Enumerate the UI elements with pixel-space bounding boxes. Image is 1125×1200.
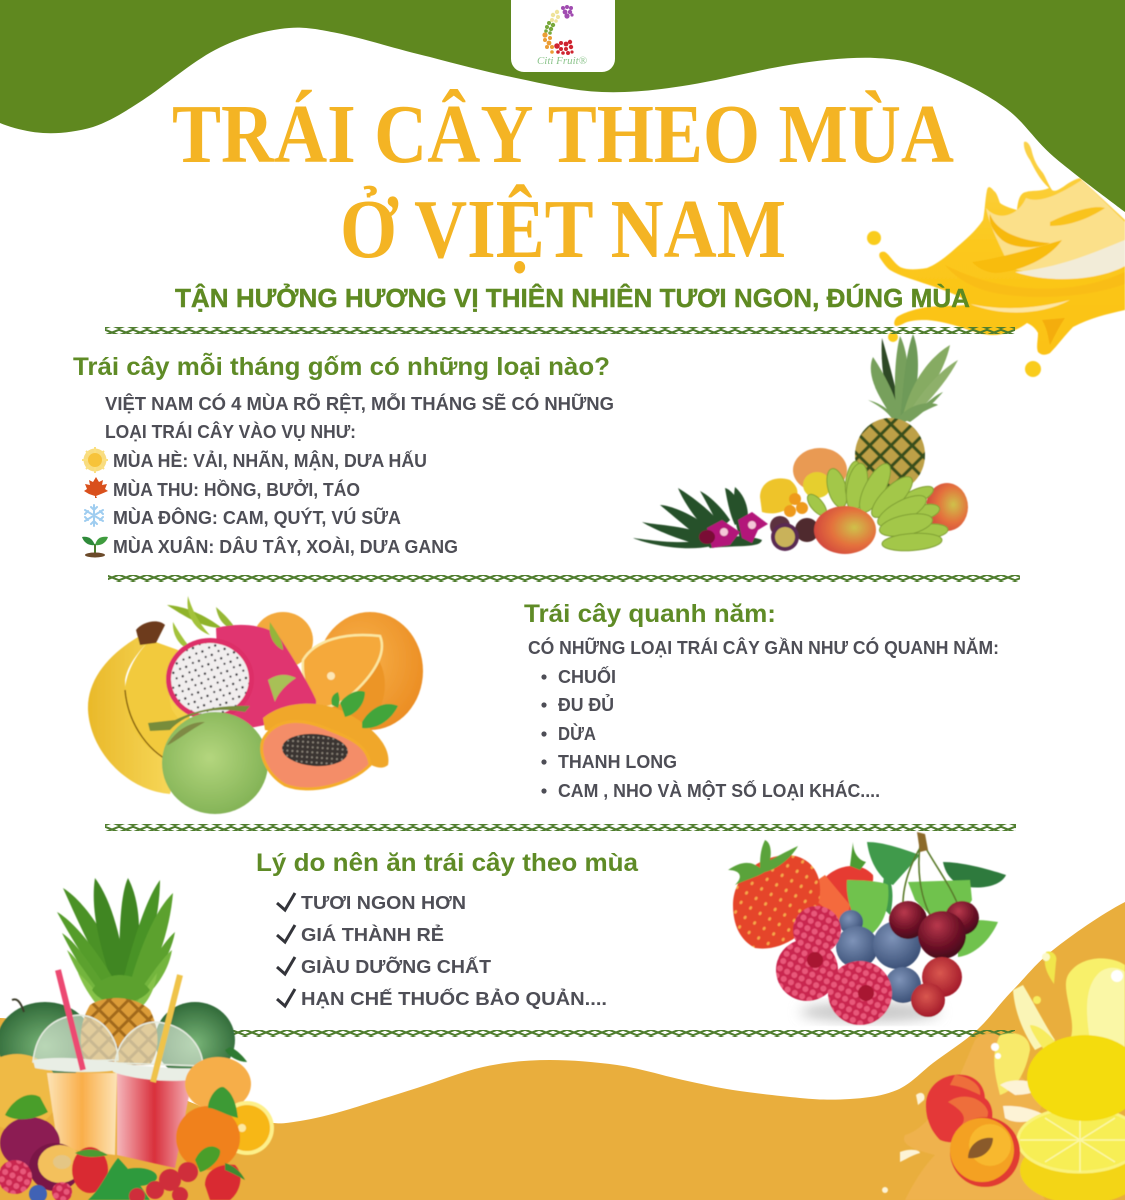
bullet list: CHUỐI (558, 666, 616, 687)
green top wave (0, 0, 1125, 212)
small raspberry (52, 1182, 72, 1200)
orange leaves (331, 691, 398, 728)
bullet list: DỪA (558, 723, 596, 744)
checklist (277, 893, 607, 1009)
pineapple crown (868, 334, 958, 423)
cranberries (911, 957, 962, 1017)
blueberry (29, 1185, 47, 1200)
shadow (800, 1002, 940, 1022)
divider 2 (108, 575, 1020, 582)
illustration: lemon and peach splash (882, 952, 1125, 1200)
right cup (110, 1022, 203, 1168)
oranges (253, 612, 423, 732)
pineapple body (81, 998, 158, 1065)
cherry (926, 1075, 992, 1142)
peach half (950, 1117, 1020, 1187)
icon: sun (82, 447, 108, 473)
plum (0, 1117, 60, 1169)
icon: maple leaf (84, 477, 108, 498)
checklist: TƯƠI NGON HƠN (301, 893, 466, 913)
blueberries (836, 910, 921, 1003)
divider 4 (225, 1030, 1015, 1037)
mint leaves (867, 842, 1006, 915)
cherry stems (903, 845, 958, 915)
divider 1 (105, 327, 1015, 334)
season: summer: MÙA HÈ: VẢI, NHÃN, MẬN, DƯA HẤU (113, 450, 427, 471)
strawberry left (72, 1147, 108, 1193)
icon: snowflake (85, 505, 103, 526)
papaya (262, 704, 388, 789)
juice splash (867, 142, 1125, 377)
checklist: GIÁ THÀNH RẺ (301, 924, 444, 945)
bananas (88, 621, 196, 794)
title (172, 88, 954, 276)
strawberry (728, 840, 820, 949)
strawberry half (810, 866, 873, 922)
mint on plum (5, 1095, 48, 1119)
illustration: year-round fruit (88, 596, 423, 814)
title: TRÁI CÂY THEO MÙA (172, 88, 954, 181)
peach (185, 1047, 251, 1111)
green bananas (804, 459, 949, 553)
checklist: GIÀU DƯỠNG CHẤT (301, 956, 491, 977)
bullet list (541, 666, 880, 801)
pineapple crown (57, 878, 175, 1008)
illustration: smoothies and fruit (0, 878, 274, 1200)
cherries (889, 901, 979, 959)
season: winter: MÙA ĐÔNG: CAM, QUÝT, VÚ SỮA (113, 507, 401, 528)
back mango (793, 448, 847, 492)
panel: year-round text (524, 600, 999, 801)
strawberry right (205, 1163, 245, 1200)
illustration: berries (728, 832, 1006, 1025)
small mint (195, 1146, 220, 1172)
season: spring: MÙA XUÂN: DÂU TÂY, XOÀI, DƯA GANG (113, 536, 458, 557)
currants (129, 1162, 198, 1200)
physalis (784, 493, 808, 517)
logo mark: dotted C (542, 5, 574, 55)
orange (176, 1106, 240, 1170)
bullet list: ĐU ĐỦ (558, 694, 614, 715)
stem knot (917, 832, 928, 852)
orange slice (220, 1101, 274, 1155)
green leaves (847, 880, 998, 957)
panel: monthly fruit text (73, 351, 614, 558)
front mango (814, 506, 876, 554)
melon (0, 1054, 59, 1130)
basil (88, 1158, 157, 1200)
lemon half and slice (1018, 1035, 1125, 1200)
checklist: HẠN CHẾ THUỐC BẢO QUẢN.... (301, 988, 607, 1009)
passion fruits (770, 516, 790, 536)
logo wordmark: Citi Fruit® (537, 56, 587, 67)
pineapple body (855, 418, 925, 492)
dragon fruit (166, 596, 316, 728)
right mango (926, 483, 968, 531)
panel: reasons text (256, 849, 639, 1009)
heading: year-round: Trái cây quanh năm: (524, 600, 776, 628)
logo badge (511, 0, 615, 72)
intro text: LOẠI TRÁI CÂY VÀO VỤ NHƯ: (105, 421, 356, 442)
orchids (699, 512, 768, 548)
icon: sprout (82, 537, 108, 558)
heading: monthly fruit: Trái cây mỗi tháng gốm có những loại nào? (73, 351, 610, 381)
bullet list: THANH LONG (558, 752, 677, 772)
divider 3 (105, 824, 1016, 831)
green coconut (148, 706, 268, 814)
plum half (29, 1143, 82, 1191)
bullet list: CAM , NHO VÀ MỘT SỐ LOẠI KHÁC.... (558, 780, 880, 801)
heading: reasons: Lý do nên ăn trái cây theo mùa (256, 849, 639, 877)
pale splash (1013, 952, 1125, 1055)
left cup (33, 1015, 118, 1155)
palm leaf (633, 487, 762, 548)
subtitle: TẬN HƯỞNG HƯƠNG VỊ THIÊN NHIÊN TƯƠI NGON, ĐÚNG MÙA (175, 282, 970, 313)
watermelons (0, 999, 235, 1082)
intro text: CÓ NHỮNG LOẠI TRÁI CÂY GẦN NHƯ CÓ QUANH NĂM: (528, 637, 999, 658)
intro text (105, 393, 614, 442)
star fruit (760, 478, 798, 513)
pink straw (58, 970, 83, 1070)
intro text: VIỆT NAM CÓ 4 MÙA RÕ RỆT, MỖI THÁNG SẼ CÓ NHỮNG (105, 393, 614, 414)
raspberries (776, 906, 892, 1025)
raspberry (0, 1160, 32, 1194)
lemon (803, 472, 831, 498)
yellow straw (153, 975, 180, 1082)
orange bottom wave (0, 902, 1125, 1200)
illustration: tropical fruit pile (633, 334, 968, 554)
orange leaf (208, 1087, 238, 1118)
title: Ở VIỆT NAM (340, 183, 786, 276)
season: autumn: MÙA THU: HỒNG, BƯỞI, TÁO (113, 479, 360, 500)
orange splash (882, 1033, 1045, 1200)
